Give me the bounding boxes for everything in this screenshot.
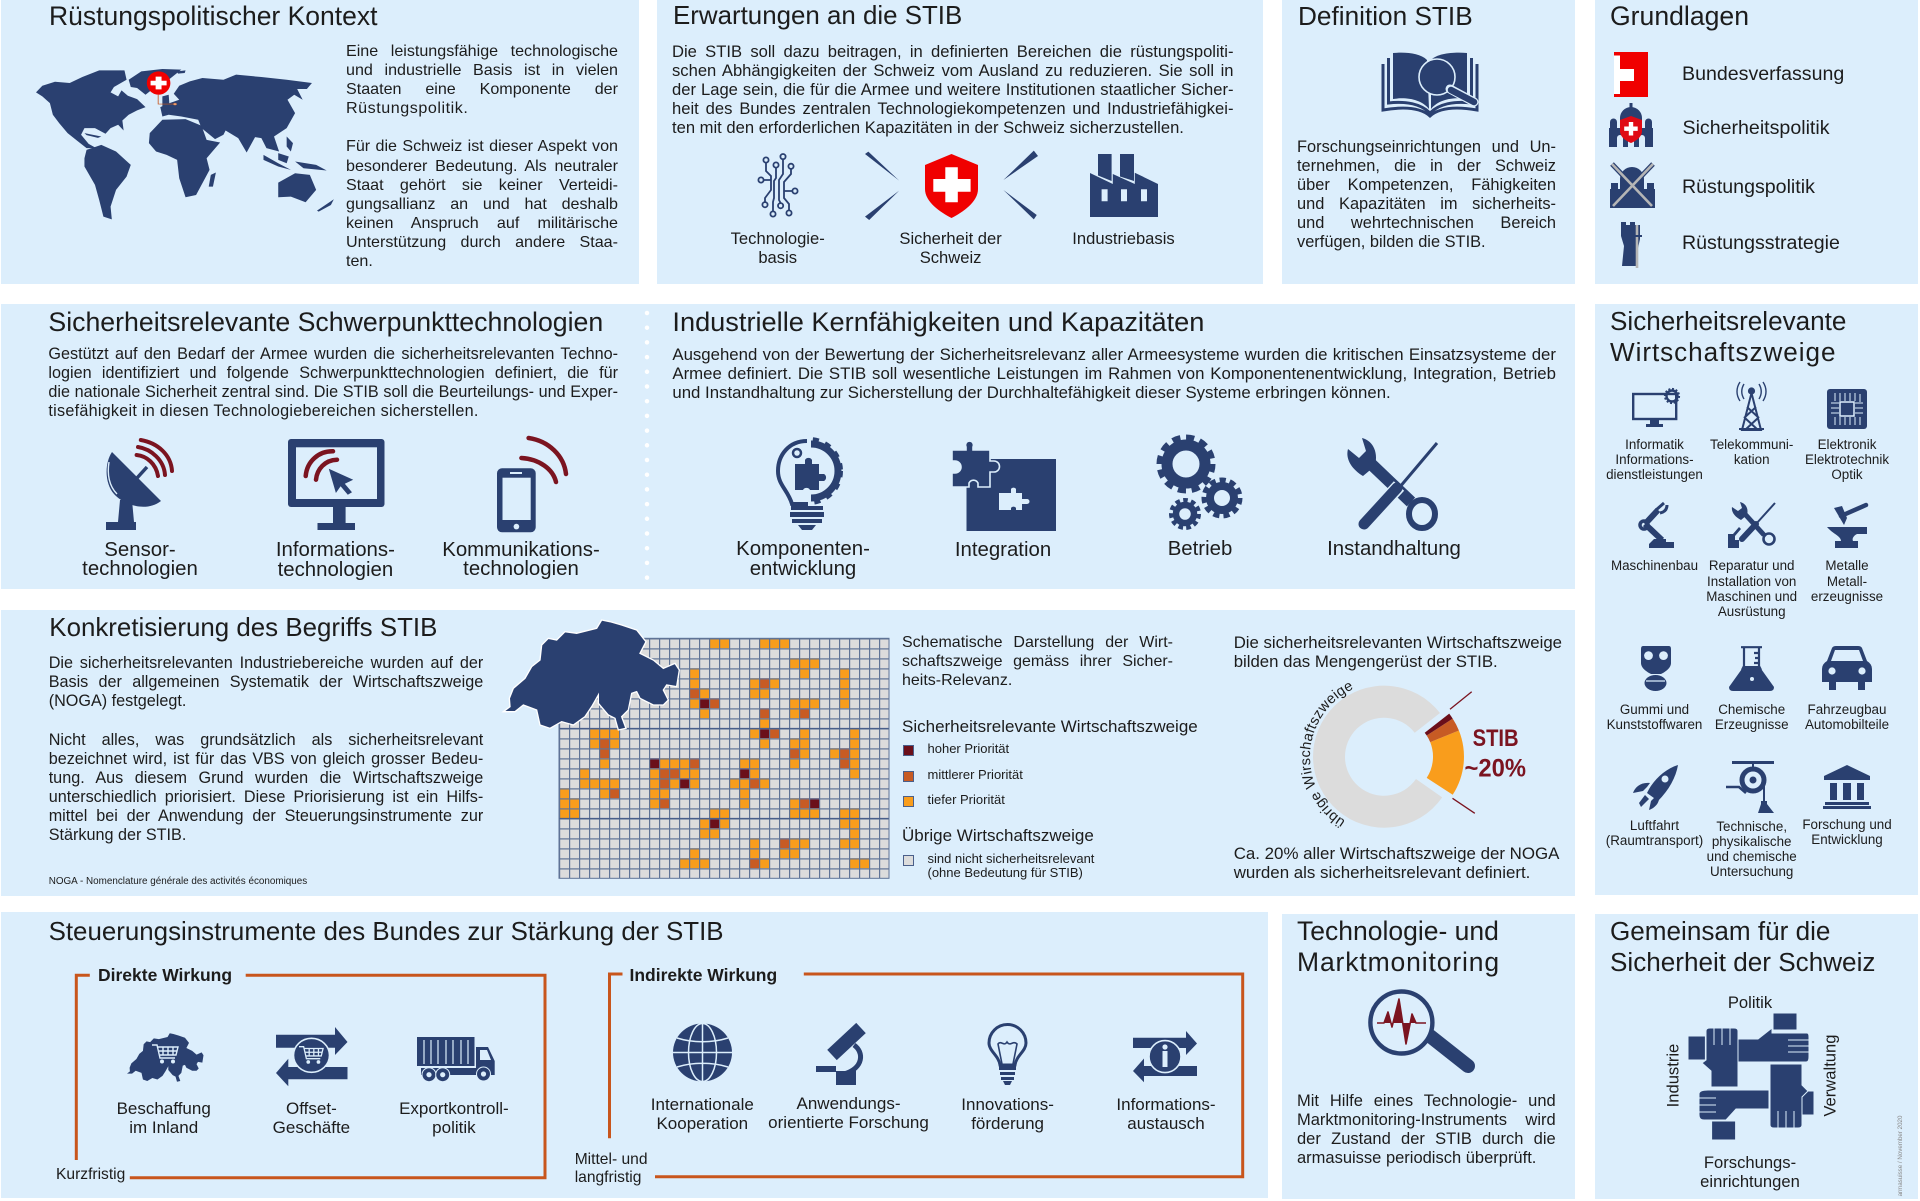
label: Reparatur: Reparatur und xyxy=(1709,558,1794,573)
icon: magnifier with pulse xyxy=(1368,989,1474,1072)
text block: Mit Hilfe eines Technologie- und xyxy=(1297,1092,1556,1110)
text block: (NOGA) festgelegt. xyxy=(49,692,186,710)
label: Luftfahrt: (Raumtransport) xyxy=(1606,833,1703,848)
label: Anwendungsorientierte Forschung xyxy=(748,1094,948,1132)
heading: Konkretisierung des Begriffs STIB xyxy=(49,614,437,642)
label: Telekommunikation: Telekommuni- xyxy=(1710,437,1793,452)
label: Exportkontrollpolitik: Exportkontroll- xyxy=(399,1099,509,1118)
heading: Technologie- und xyxy=(1297,916,1499,946)
text block: Staat gehört sie keiner Verteidi- xyxy=(346,176,618,194)
text block: armasuisse periodisch überprüft. xyxy=(1297,1149,1536,1167)
label: Anwendungsorientierte Forschung: Anwendungs- xyxy=(797,1094,900,1113)
label: Informationstechnologien: technologien xyxy=(278,559,393,581)
label: Offset-Geschäfte: Offset- xyxy=(286,1099,337,1118)
label: Chemische Erzeugnisse: Chemische xyxy=(1718,702,1785,717)
text: chart description xyxy=(902,633,1173,690)
text block: Marktmonitoring-Instruments wird xyxy=(1297,1111,1556,1129)
text block: Rüstungspolitik. xyxy=(346,99,468,117)
icon: pulley and flask xyxy=(1726,761,1774,813)
label: Luftfahrt: Luftfahrt xyxy=(1630,818,1679,833)
label: Informationsaustausch: austausch xyxy=(1127,1114,1205,1133)
icon: flask xyxy=(1729,646,1774,691)
label: Elektronik: Optik xyxy=(1831,467,1863,482)
heading: Sicherheitsrelevante xyxy=(1610,306,1846,336)
text block: der Zustand der STIB durch die xyxy=(1297,1130,1556,1148)
icon: converging spikes xyxy=(865,150,1038,220)
label: Komponentenentwicklung: entwicklung xyxy=(750,558,856,580)
heading: Grundlagen xyxy=(1610,1,1749,31)
text: Ca. 20 percent xyxy=(1234,844,1559,882)
label: Metalle: Metall- xyxy=(1827,574,1867,589)
label: Exportkontrollpolitik xyxy=(354,1099,554,1137)
label: Beschaffung xyxy=(64,1099,264,1137)
text: chart description: heits-Relevanz. xyxy=(902,672,1012,689)
chart: donut 20 percent: übrige Wirschaftszweige xyxy=(1300,683,1352,828)
label: Indirekte Wirkung: Indirekte Wirkung xyxy=(630,965,777,985)
label: Informatik: Informatik xyxy=(1625,437,1684,452)
label: Forschung xyxy=(1787,817,1907,847)
icon: offset arrows with cart xyxy=(276,1027,347,1086)
icon: Swiss shield xyxy=(925,154,978,218)
text block: und Instandhaltung zur Sicherstellung der Durchhaltefähigkeit dieser Systeme erbringen können. xyxy=(672,383,1391,402)
label: Reparatur xyxy=(1706,558,1797,619)
text block: Für die Schweiz ist dieser Aspekt von xyxy=(346,137,618,155)
text block: tisefähigkeit in diesen Technologiebereichen sicherstellen. xyxy=(48,402,479,420)
footnote: NOGA - Nomenclature générale des activités économiques xyxy=(49,876,307,887)
label: Informatik xyxy=(1606,437,1703,482)
label: Forschungseinrichtungen: Forschungs- xyxy=(1704,1153,1796,1172)
label: Sensortechnologien xyxy=(82,539,198,580)
label: Informatik: dienstleistungen xyxy=(1606,467,1703,482)
text: Ca. 20 percent: wurden als sicherheitsrelevant definiert. xyxy=(1234,863,1530,882)
text block: gungsallianz an und hat deshalb xyxy=(346,195,618,213)
world map with Swiss marker xyxy=(36,69,334,220)
text block: der Lage sein, die für die Armee und weitere Institutionen staatlicher Sicher- xyxy=(672,80,1234,99)
label: Metalle xyxy=(1811,558,1883,604)
label: Reparatur: Ausrüstung xyxy=(1718,604,1786,619)
icon: four interlocking hands xyxy=(1688,1013,1814,1140)
text: Mengengerüst xyxy=(1234,633,1562,671)
panel: Steuerungsinstrumente xyxy=(1,912,1268,1198)
legend swatch: mittlerer Priorität xyxy=(903,771,914,782)
label: Direkte Wirkung: Direkte Wirkung xyxy=(98,965,232,985)
label: Technologiebasis xyxy=(731,229,825,267)
text block: Armee definiert. Die STIB soll wesentliche Leistungen im Rahmen von Komponentenentwicklung, Integration, Betrieb xyxy=(672,364,1556,383)
label: Bundesverfassung: Bundesverfassung xyxy=(1682,63,1844,85)
label: Sensortechnologien: Sensor- xyxy=(104,539,176,561)
label: Kommunikationstechnologien xyxy=(442,539,600,580)
text block: bezeichnet wird, ist für das VBS von gleich grosser Bedeu- xyxy=(49,750,483,768)
legend swatch: tiefer Priorität xyxy=(903,796,914,807)
label: Forschungseinrichtungen xyxy=(1650,1153,1850,1191)
icon: Sicherheitspolitik building xyxy=(1609,103,1653,147)
label: Mittel- und langfristig xyxy=(575,1151,648,1186)
legend label: übrige xyxy=(928,852,1094,881)
text: Mengengerüst: Die sicherheitsrelevanten Wirtschaftszweige xyxy=(1234,633,1562,652)
text block: keinen Anspruch auf militärische xyxy=(346,214,618,232)
label: Chemische Erzeugnisse xyxy=(1692,702,1812,732)
label: Betrieb: Betrieb xyxy=(1168,538,1232,560)
legend label: tiefer Priorität: tiefer Priorität xyxy=(928,792,1005,807)
legend heading: Sicherheitsrelevante Wirtschaftszweige: Sicherheitsrelevante Wirtschaftszweige xyxy=(902,717,1198,736)
text block: verfügen, bilden die STIB. xyxy=(1297,233,1486,251)
label: Rüstungspolitik: Rüstungspolitik xyxy=(1682,176,1815,198)
label: Komponentenentwicklung: Komponenten- xyxy=(736,538,870,560)
label: Kommunikationstechnologien: Kommunikations- xyxy=(442,539,600,561)
text block: und industrielle Basis ist in vielen xyxy=(346,61,618,79)
text block xyxy=(1297,1092,1556,1168)
text block: ternehmen, die in der Schweiz xyxy=(1297,157,1556,175)
text: chart description: Schematische Darstellung der Wirt- xyxy=(902,634,1173,651)
icon: puzzle xyxy=(952,442,1056,531)
label: Sicherheitspolitik: Sicherheitspolitik xyxy=(1682,116,1830,138)
icon: robot arm xyxy=(1638,502,1674,548)
text block: die nationale Sicherheit zentral sind. Die STIB soll die Beurteilungs- und Exper- xyxy=(48,383,618,401)
label: Reparatur: Maschinen und xyxy=(1706,589,1797,604)
heading xyxy=(1297,916,1500,978)
icon: book with magnifier xyxy=(1382,52,1478,118)
label: Elektronik xyxy=(1805,437,1889,482)
text block xyxy=(672,42,1234,137)
text block: heit des Bundes zentralen Technologiekompetenzen und Industriefähigkei- xyxy=(672,99,1234,118)
icon: microscope xyxy=(816,1024,866,1085)
label: Sicherheit der Schweiz: Schweiz xyxy=(920,248,981,267)
heading: Erwartungen an die STIB xyxy=(673,2,962,30)
icon: temple xyxy=(1823,765,1871,809)
label: Telekommunikation xyxy=(1710,437,1793,467)
text: Ca. 20 percent: Ca. 20% aller Wirtschaftszweige der NOGA xyxy=(1234,844,1559,863)
icon: monitor with cursor xyxy=(288,439,384,530)
text block: ten. xyxy=(346,252,373,270)
icon: monitor with gear xyxy=(1632,388,1680,427)
label: Luftfahrt xyxy=(1594,818,1714,848)
heading xyxy=(1610,306,1846,367)
label: Internationale Kooperation xyxy=(602,1095,802,1133)
icon: truck xyxy=(417,1037,495,1082)
label: Informationsaustausch xyxy=(1066,1095,1266,1133)
frame: Direkte Wirkung xyxy=(71,972,551,1182)
label: Elektronik: Elektrotechnik xyxy=(1805,452,1889,467)
icon: Bundesverfassung flag xyxy=(1614,52,1648,97)
label: Industrie: Industrie xyxy=(1663,1044,1682,1107)
panel: Gemeinsam für die Sicherheit der Schweiz xyxy=(1595,914,1918,1199)
icon: car xyxy=(1822,646,1872,690)
label: Industriebasis: Industriebasis xyxy=(1072,229,1175,248)
label: Technische Untersuchung: Technische, xyxy=(1716,818,1787,834)
label: Politik: Politik xyxy=(1728,993,1772,1012)
text block: Die sicherheitsrelevanten Industriebereiche wurden auf der xyxy=(49,654,483,672)
icon: gears xyxy=(1156,434,1242,530)
label: Komponentenentwicklung xyxy=(736,538,870,580)
text block: schen Abhängigkeiten der Schweiz vom Ausland zu reduzieren. Sie soll in xyxy=(672,61,1234,80)
heading: Steuerungsinstrumente des Bundes zur Stärkung der STIB xyxy=(49,918,724,946)
label: Technische Untersuchung: Untersuchung xyxy=(1710,864,1793,879)
icon: gas mask xyxy=(1641,646,1671,691)
heading: Wirtschaftszweige xyxy=(1610,337,1836,367)
chart: Swiss map and sector grid xyxy=(503,618,891,890)
label: Informationstechnologien: Informations- xyxy=(276,539,395,561)
label: Integration: Integration xyxy=(955,539,1051,561)
heading: Sicherheit der Schweiz xyxy=(1610,947,1875,977)
icon: rocket xyxy=(1633,765,1678,810)
legend label: hoher Priorität: hoher Priorität xyxy=(928,741,1009,756)
label: Beschaffung: Beschaffung xyxy=(117,1099,211,1118)
text block: Stärkung der STIB. xyxy=(49,826,186,844)
legend label: übrige: sind nicht sicherheitsrelevant xyxy=(928,851,1094,866)
panel: Rüstungspolitischer Kontext xyxy=(1,0,639,284)
text block: logien identifiziert und folgende Schwerpunkttechnologien definiert, die für xyxy=(48,364,618,382)
label: Technische Untersuchung: physikalische xyxy=(1712,834,1792,849)
text block: und wehrtechnischen Bereich xyxy=(1297,214,1556,232)
label: Innovationsförderung: förderung xyxy=(971,1114,1044,1133)
label: Gummi xyxy=(1594,702,1714,732)
panel: Grundlagen xyxy=(1595,0,1918,284)
icon: wrench and screwdriver xyxy=(1347,438,1438,531)
label: Informationsaustausch: Informations- xyxy=(1116,1095,1216,1114)
label: Maschinenbau: Maschinenbau xyxy=(1611,558,1698,573)
label: Chemische Erzeugnisse: Erzeugnisse xyxy=(1715,717,1789,732)
icon: light bulb with gear and puzzle xyxy=(776,437,843,530)
panel: Sicherheitsrelevante Wirtschaftszweige xyxy=(1595,304,1918,895)
icon: light bulb xyxy=(987,1023,1028,1085)
icon: globe xyxy=(673,1023,732,1082)
text block: Unterstützung durch andere Staa- xyxy=(346,233,618,251)
icon: information exchange arrows xyxy=(1132,1031,1196,1082)
heading: Marktmonitoring xyxy=(1297,947,1500,977)
label: Informatik: Informations- xyxy=(1615,452,1694,467)
icon: smartphone with signal xyxy=(496,436,568,532)
label: Forschungseinrichtungen: einrichtungen xyxy=(1700,1172,1800,1191)
chart: donut 20 percent: STIB xyxy=(1473,725,1519,752)
text block: tung. Aus diesem Grund wurden die Wirtschaftszweige xyxy=(49,769,483,787)
icon: tools with robot arm xyxy=(1728,502,1776,548)
panel: Konkretisierung des Begriffs STIB xyxy=(1,610,1575,896)
text block: Die STIB soll dazu beitragen, in definierten Bereichen die rüstungspoliti- xyxy=(672,42,1234,61)
legend heading: Übrige Wirtschaftszweige: Übrige Wirtschaftszweige xyxy=(902,826,1094,845)
text block: mittel bei der Anwendung der Steuerungsinstrumente zur xyxy=(49,807,483,825)
text block: Nicht alles, was grundsätzlich als sicherheitsrelevant xyxy=(49,731,483,749)
panel: Erwartungen an die STIB xyxy=(657,0,1263,284)
label: Gummi: Kunststoffwaren xyxy=(1607,717,1702,732)
label: Sicherheit der Schweiz xyxy=(899,229,1002,267)
icon: telecom tower xyxy=(1736,382,1767,431)
label: Technische Untersuchung: und chemische xyxy=(1707,849,1797,864)
text block: über Kompetenzen, Fähigkeiten xyxy=(1297,176,1556,194)
icon: Rüstungsstrategie tower and sword xyxy=(1621,222,1642,268)
legend swatch: hoher Priorität xyxy=(903,745,914,756)
label: Fahrzeugbau: Automobilteile xyxy=(1805,717,1889,732)
heading xyxy=(1610,916,1875,978)
panel: Definition STIB xyxy=(1282,0,1575,284)
heading: Definition STIB xyxy=(1298,1,1473,31)
legend label: mittlerer Priorität: mittlerer Priorität xyxy=(928,767,1023,782)
text block: besonderer Bedeutung. Als neutraler xyxy=(346,157,618,175)
text: Mengengerüst: bilden das Mengengerüst der STIB. xyxy=(1234,652,1498,671)
label: Telekommunikation: kation xyxy=(1734,452,1770,467)
heading: Sicherheitsrelevante Schwerpunkttechnologien xyxy=(48,307,603,337)
icon: circuit chip xyxy=(1827,389,1867,429)
heading: Gemeinsam für die xyxy=(1610,916,1830,946)
chart: donut 20 percent: ~20% xyxy=(1464,755,1526,783)
icon: technology circuit xyxy=(758,153,798,218)
label: Reparatur: Installation von xyxy=(1707,574,1796,589)
text block: Ausgehend von der Bewertung der Sicherheitsrelevanz aller Armeesysteme wurden die kritischen Einsatzsysteme der xyxy=(672,345,1556,364)
label: Offset-Geschäfte xyxy=(211,1099,411,1137)
icon: Rüstungspolitik crossed swords xyxy=(1610,162,1655,208)
panel: Technologie- und Marktmonitoring xyxy=(1282,914,1575,1199)
label: Metalle: Metalle xyxy=(1825,558,1869,573)
label: Kurzfristig: Kurzfristig xyxy=(56,1166,125,1183)
text block xyxy=(346,42,618,270)
label: Fahrzeugbau xyxy=(1787,702,1907,732)
label: Internationale Kooperation: Kooperation xyxy=(656,1114,748,1133)
label: Technische Untersuchung xyxy=(1692,818,1812,880)
label: Kommunikationstechnologien: technologien xyxy=(463,558,579,580)
label: Innovationsförderung: Innovations- xyxy=(961,1095,1054,1114)
label: Forschung: Forschung und xyxy=(1802,817,1892,832)
label: Rüstungsstrategie: Rüstungsstrategie xyxy=(1682,232,1840,254)
label: Informationstechnologien xyxy=(276,539,395,581)
text block: unterschiedlich priorisiert. Diese Priorisierung ist ein Hilfs- xyxy=(49,788,483,806)
heading: Rüstungspolitischer Kontext xyxy=(49,1,377,31)
label: Forschung: Entwicklung xyxy=(1811,832,1883,847)
icon: anvil and hammer xyxy=(1827,502,1868,548)
label: Instandhaltung: Instandhaltung xyxy=(1327,538,1461,560)
panel: Sicherheitsrelevante Schwerpunkttechnologien xyxy=(1,304,647,589)
label: Sensortechnologien: technologien xyxy=(82,558,198,580)
text block: Eine leistungsfähige technologische xyxy=(346,42,618,60)
label: Verwaltung: Verwaltung xyxy=(1820,1034,1839,1117)
label: Sicherheit der Schweiz: Sicherheit der xyxy=(899,229,1002,248)
chart: donut 20 percent xyxy=(1290,680,1535,835)
label: Mittel- und langfristig: langfristig xyxy=(575,1169,641,1186)
label: Internationale Kooperation: Internationale xyxy=(651,1095,754,1114)
credit: armasuisse / November 2020 xyxy=(1897,1116,1904,1196)
text block xyxy=(48,345,618,420)
label: Innovationsförderung xyxy=(908,1095,1108,1133)
text block: ten mit den erforderlichen Kapazitäten in der Schweiz sicherzustellen. xyxy=(672,118,1184,137)
label: Anwendungsorientierte Forschung: orientierte Forschung xyxy=(768,1113,929,1132)
text block: und Kapazitäten im sicherheits- xyxy=(1297,195,1556,213)
label: Technologiebasis: basis xyxy=(758,248,797,267)
label: Fahrzeugbau: Fahrzeugbau xyxy=(1808,702,1886,717)
text block xyxy=(672,345,1556,402)
label: Technologiebasis: Technologie- xyxy=(731,229,825,248)
legend label: übrige: (ohne Bedeutung für STIB) xyxy=(928,865,1083,880)
label: Elektronik: Elektronik xyxy=(1818,437,1876,452)
label: Metalle: erzeugnisse xyxy=(1811,589,1883,604)
label: Exportkontrollpolitik: politik xyxy=(432,1118,476,1137)
heading: Industrielle Kernfähigkeiten und Kapazitäten xyxy=(672,306,1204,337)
panel: Industrielle Kernfähigkeiten und Kapazitäten xyxy=(647,304,1575,589)
text block: Staaten eine Komponente der xyxy=(346,80,618,98)
icon: factory xyxy=(1090,154,1158,217)
frame: Indirekte Wirkung xyxy=(605,972,1250,1182)
text block xyxy=(1297,138,1556,251)
text block xyxy=(49,654,483,845)
text block: Gestützt auf den Bedarf der Armee wurden die sicherheitsrelevanten Techno- xyxy=(48,345,618,363)
legend swatch: übrige xyxy=(903,855,914,866)
label: Gummi: Gummi und xyxy=(1620,702,1689,717)
text block: Forschungseinrichtungen und Un- xyxy=(1297,138,1556,156)
text: chart description: schaftszweige gemäss ihrer Sicher- xyxy=(902,653,1173,670)
label: Beschaffung: im Inland xyxy=(129,1118,198,1137)
label: Offset-Geschäfte: Geschäfte xyxy=(273,1118,350,1137)
text block: Basis der allgemeinen Systematik der Wirtschaftszweige xyxy=(49,673,483,691)
icon: Switzerland with shopping cart xyxy=(126,1033,203,1082)
label: Mittel- und langfristig: Mittel- und xyxy=(575,1151,648,1168)
icon: satellite dish xyxy=(106,438,174,530)
